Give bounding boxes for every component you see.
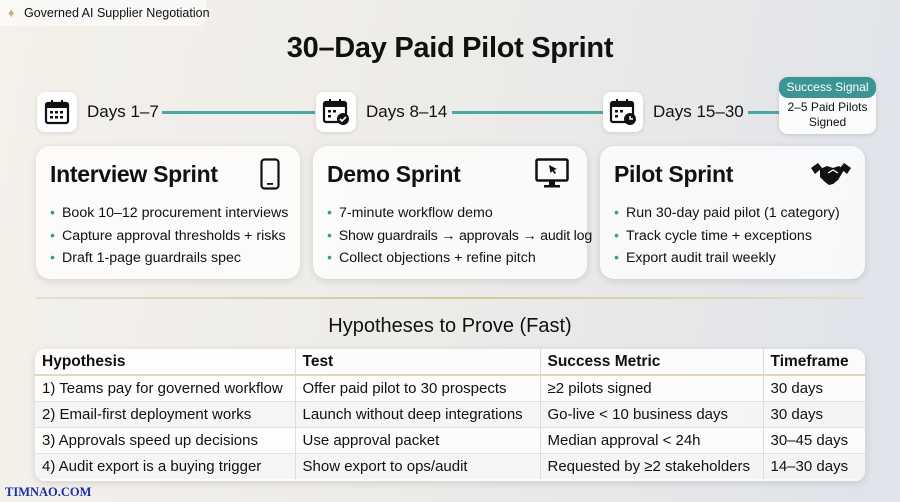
table: hypotheses [35,349,865,481]
table: hypotheses: Show export to ops/audit [302,458,468,475]
icon: calendar 3 [603,92,643,132]
panel: interview sprint: Draft 1-page guardrails spec [62,250,241,266]
panel: pilot sprint: Pilot Sprint [614,161,733,187]
table: hypotheses: 30–45 days [770,432,848,448]
table: hypotheses: 2) Email-first deployment works [42,406,251,422]
panel: pilot sprint: Track cycle time + exceptions [626,228,812,244]
icon: monitor [535,158,569,188]
table: hypotheses: Launch without deep integrations [302,406,523,422]
title: 30–Day Paid Pilot Sprint [287,32,613,64]
panel: demo sprint: Collect objections + refine pitch [339,250,536,266]
table: hypotheses: 1) Teams pay for governed workflow [42,380,283,397]
table: hypotheses: Median approval < 24h [548,432,701,448]
table: hypotheses: Go-live < 10 business days [548,406,728,422]
panel: pilot sprint: Export audit trail weekly [626,250,776,266]
tag: header label: ♦ [8,6,14,20]
panel: demo sprint [313,146,587,279]
table: hypotheses: 30 days [770,380,823,397]
table: hypotheses: Hypothesis [42,352,126,370]
panel: pilot sprint: Run 30-day paid pilot (1 category) [626,205,840,221]
table: hypotheses: 3) Approvals speed up decisions [42,432,258,448]
timeline [36,76,878,136]
icon: calendar 1 [37,92,77,132]
label: Days 8–14: Days 8–14 [366,102,447,121]
panel: interview sprint: Capture approval thresholds + risks [62,228,286,244]
panel: interview sprint [36,146,300,279]
table: hypotheses: Success Metric [548,352,660,370]
table: hypotheses: Requested by ≥2 stakeholders [548,458,750,475]
panel: interview sprint: Interview Sprint [50,161,218,187]
callout: success signal [779,77,876,134]
table: hypotheses: Offer paid pilot to 30 prospects [302,380,507,397]
panel: interview sprint: Book 10–12 procurement interviews [62,205,288,221]
icon: phone [260,158,280,190]
table: hypotheses: 4) Audit export is a buying trigger [42,458,261,475]
table: hypotheses: 30 days [770,406,823,422]
tag: header label [0,0,206,26]
label: Days 15–30: Days 15–30 [653,102,744,121]
icon: calendar 2 [316,92,356,132]
watermark: TIMNAO.COM [5,485,91,499]
table: hypotheses: 14–30 days [770,458,848,475]
icon: handshake [811,163,851,185]
callout: success signal: Success Signal [786,80,869,94]
table: hypotheses: Test [302,352,333,370]
panel: demo sprint: Show guardrails → approvals → audit log [339,228,592,244]
table: hypotheses: Timeframe [770,352,849,370]
table: hypotheses: ≥2 pilots signed [548,380,652,397]
panel: demo sprint: 7-minute workflow demo [339,205,493,221]
tag: header label: Governed AI Supplier Negotiation [24,6,210,20]
callout: success signal: 2–5 Paid Pilots [787,100,868,114]
callout: success signal: Signed [809,115,846,129]
table: hypotheses: Use approval packet [302,432,439,448]
panel: pilot sprint [600,146,865,279]
heading: hypotheses: Hypotheses to Prove (Fast) [328,315,572,337]
label: Days 1–7: Days 1–7 [87,102,159,121]
panel: demo sprint: Demo Sprint [327,161,460,187]
